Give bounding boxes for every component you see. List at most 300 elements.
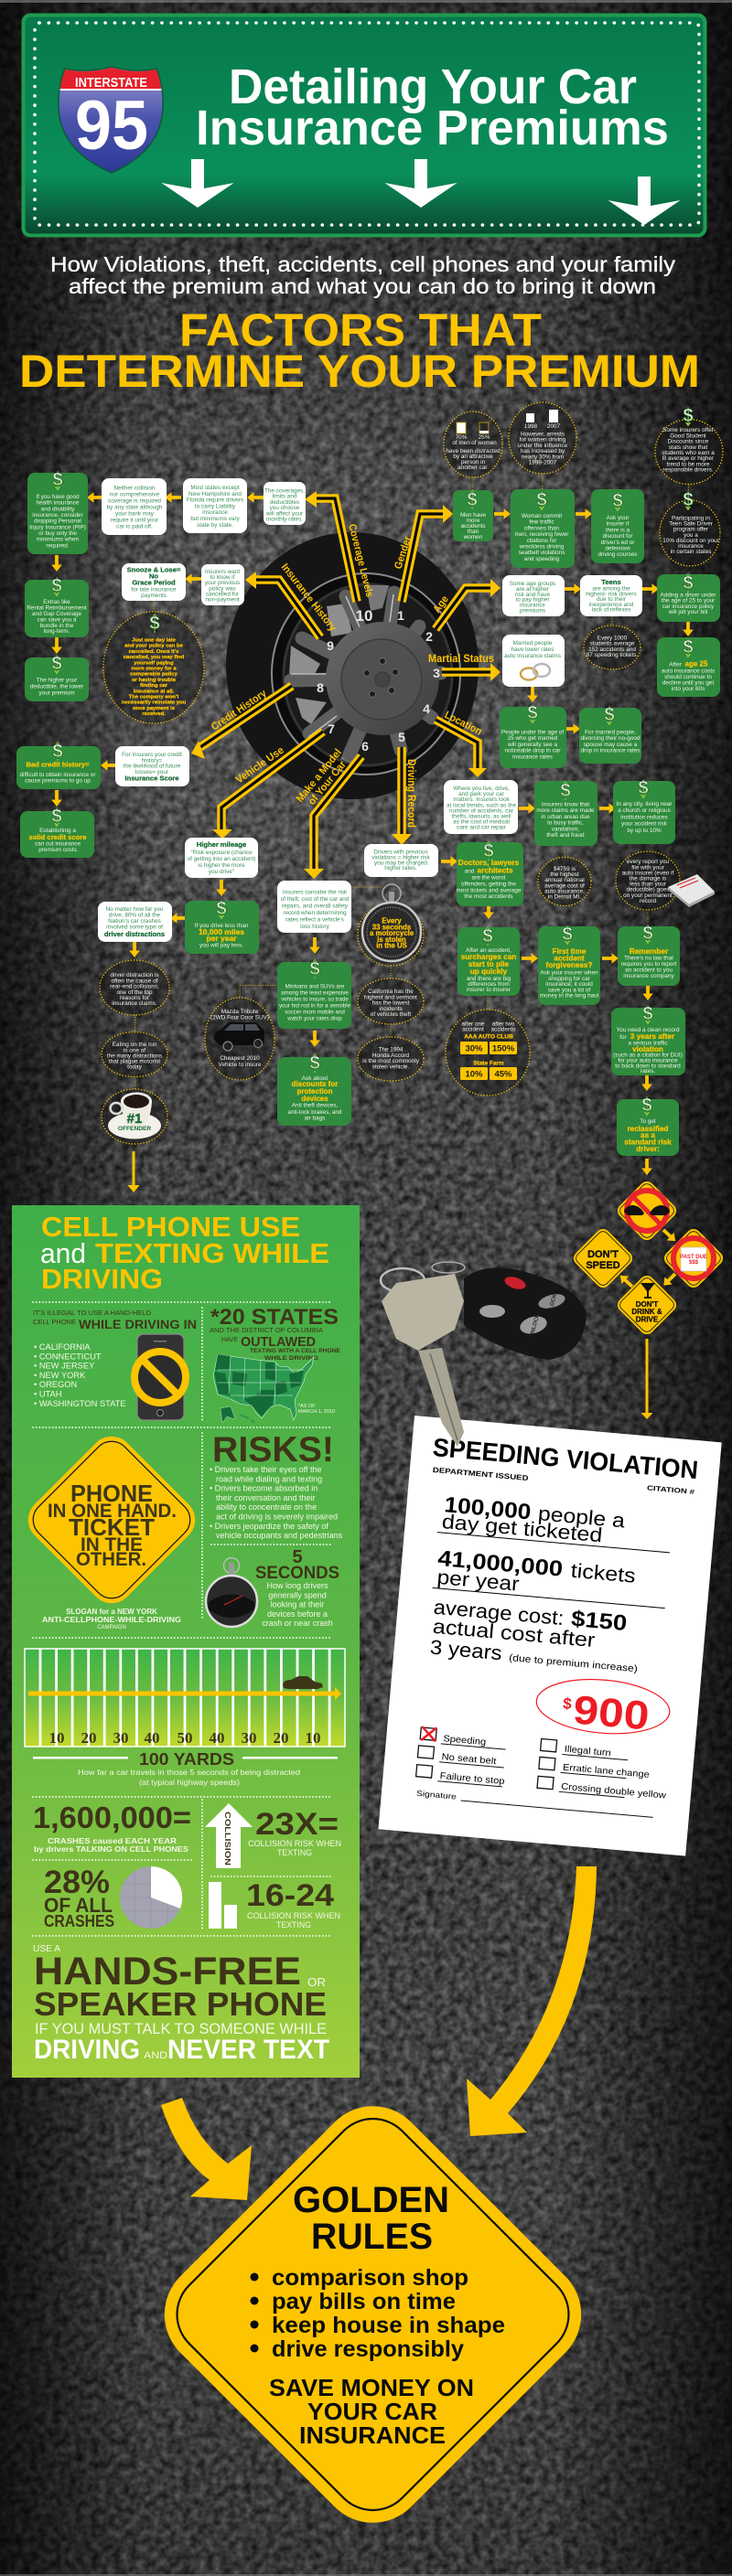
spoke numbers: 4 [423,701,430,716]
panel heading: TEXTING WHILE [95,1237,329,1269]
speeding violation ticket: day get ticketed [441,1510,603,1546]
icon: dollar: $ [683,637,694,657]
box: liability minimums: New Hampshire and [188,491,242,497]
hands-free advice: DRIVING [34,2035,140,2065]
icon: dollar: $ [51,576,62,596]
callout: permanent record: file with your [631,864,665,871]
panel heading: and [40,1237,86,1269]
box: church nearby: by up to 10% [627,828,662,834]
box: surcharges: After an accident, [466,947,511,954]
callout: detroit cost: $4759 is [554,866,576,872]
hands-free advice: HANDS-FREE [34,1950,301,1993]
callout: coffee number 1 offender: #1 [127,1111,142,1127]
box: liability minimums [183,478,247,533]
risks: RISKS! [212,1430,334,1470]
football field chart: 30 [113,1729,128,1747]
callout: mazda tribute: Mazda Tribute [221,1009,259,1015]
box: higher mileage: you drive" [209,869,234,875]
box: church nearby: institution reduces [620,814,668,820]
box: surcharges: and there are big [467,976,511,982]
slogan diamond sign: TICKET [69,1513,155,1541]
icon: wedding rings [521,664,550,680]
box: minivans: Minivans and SUVs are [285,984,345,989]
road arrow: gender: Gender [393,535,414,571]
icon: dollar: $ [527,703,538,723]
callout: california theft: highest and vermont [364,994,417,1000]
spoke numbers: 5 [398,730,405,744]
illegal states list: WHILE DRIVING IN [79,1317,197,1331]
28 percent stat: CRASHES [44,1912,114,1930]
box: protection devices: air bags [305,1116,325,1121]
16-24 stat: TEXTING [276,1920,311,1929]
box: deductible: The higher your [37,677,78,684]
icon: dollar: $ [562,925,573,945]
callout: every 1000 students: 152 accidents and [588,647,636,653]
illegal states list: • CONNECTICUT [34,1352,102,1361]
road arrow: martial status [428,654,501,681]
box: teens: highest- risk drivers [586,591,637,597]
callout: men distracted: have been distracted [446,448,501,454]
icon: dollar: $ [52,742,63,762]
5 seconds: SECONDS [255,1564,339,1583]
box: divorce: divorcing their no-good [580,735,640,742]
checkboxes: Signature [416,1789,458,1801]
box: women offenses: seatbelt violations [519,550,565,556]
box: minivans: soccer mom mobile and [285,1010,345,1015]
checkboxes: Failure to stop [439,1771,505,1787]
box: driver distractions: No matter how far you [106,906,164,913]
box: clean record: to back down to standard [615,1063,681,1069]
football field chart: 20 [273,1729,289,1747]
football field chart: 40 [209,1729,225,1747]
box: doctors lawyers architects [456,841,523,906]
box: age groups: Some age groups [510,581,555,587]
checkboxes: No seat belt [441,1752,497,1767]
callout: women DUI arrests: nearly 30% from [522,454,564,460]
box: higher mileage: "Risk exposure (chance [190,850,253,856]
icon: dollar: $ [149,614,160,634]
hands-free advice [33,1944,329,2065]
callout: one day late: The company won't [129,695,178,700]
box: insurers want to know: to know if [210,574,235,581]
box: where you live: as the cost of medical [453,819,510,826]
box: accident forgiveness: shopping for car [548,976,591,982]
box: health insurance tip: and disability [41,506,75,512]
callout: women DUI arrests: 1998 [524,423,538,430]
box: doctors lawyers architects: the most accidents [464,893,513,900]
speeding violation ticket: DEPARTMENT ISSUED [433,1466,529,1482]
box: driver's ed discount: driver's ed or [601,540,635,546]
box: theft and repairs [277,881,351,933]
title: Detailing Your Car [229,59,637,114]
box: previous violations: Drivers with previous [373,849,428,856]
collision arrow [205,1803,253,1868]
box: insurance score [115,746,189,786]
box: reclassified [617,1096,679,1156]
box: snooze and lose: for late insurance [131,587,177,593]
icon: dollar: $ [482,926,493,946]
golden rules heading: GOLDEN [293,2180,449,2220]
callout: men distracted: of women [471,440,497,446]
hands-free advice: OR [307,1975,326,1989]
box: coverages [264,482,306,525]
20 states stat: WHILE DRIVING [264,1355,318,1362]
box: health insurance tip: If you have good [36,494,80,500]
box: driver's ed discount: there is a [606,527,630,533]
callout: honda accord: is the most commonly [362,1058,420,1064]
box: extras [25,576,89,637]
callout: surcharge table: accidents [490,1026,516,1033]
icon: dollar: $ [641,1096,652,1116]
callout: permanent record: every report you [627,859,670,865]
box: women offenses: Woman commit [522,513,562,519]
box: under 25 married: noticeable drop in car [504,748,561,754]
icon: dollar: $ [638,778,649,798]
box: liability minimums: to carry Liability [195,503,236,509]
curved arrow: from panel to golden rules [161,2098,252,2200]
callout: mazda tribute: Vehicle to insure [219,1062,262,1068]
panel heading: CELL PHONE USE [41,1211,300,1243]
dotted connectors [135,474,688,1089]
box: accident forgiveness: insurance; it could [545,981,593,988]
heading: factors [19,305,700,397]
callout: women DUI arrests: 1998-2007 [529,459,557,466]
23x stat: TEXTING [277,1848,312,1857]
box: teens: Teens [601,578,621,586]
subtitle: affect the premium and what you can do to bring it down [69,274,656,298]
risks: road while dialing and texting [216,1474,322,1483]
box: coverages: limits and [273,494,297,500]
box: adding a driver under 25 [657,572,720,622]
callout: surcharge table: after two [492,1021,515,1028]
callout: rear-end: often the cause of [112,978,158,984]
golden rules heading [293,2180,449,2257]
risks: • Drivers jeopardize the safety of [210,1522,328,1531]
box: clean record: 3 years after [630,1032,675,1041]
title: Insurance Premiums [196,101,669,155]
road arrow: coverage levels [305,491,375,602]
speeding violation ticket: 100,000 [443,1492,532,1524]
callout: men distracted: another car. [458,465,489,471]
hands-free advice: SPEAKER PHONE [34,1985,327,2023]
callout: every 1000 students [584,625,640,669]
box: doctors lawyers architects: Doctors, lawyers [458,858,520,867]
heading: factors: DETERMINE YOUR PREMIUM [19,346,700,397]
box: driver distractions: drive, 80% of all the [109,913,161,918]
speeding violation ticket: CITATION # [647,1483,695,1496]
box: solid credit score: can cut insurance [35,841,81,847]
road arrow: martial status: Martial Status [428,654,494,665]
callout: stopwatch motorcycle theft: Every [382,916,402,925]
box: after age 25 [657,637,720,697]
box: adding a driver under 25: car insurance policy [662,604,715,610]
callout: surcharge table: after one [461,1021,485,1028]
box: bad credit history: difficult to obtain insurance or [19,772,96,778]
box: doctors lawyers architects: are the worst [472,874,506,882]
callout: detroit cost: auto insurance, [544,888,585,894]
icon: dollar: $ [604,705,615,725]
box: accident forgiveness: First time [553,947,587,956]
golden rules heading: RULES [311,2217,433,2257]
crashes stat [33,1801,191,1854]
icon: martini glass [640,1283,655,1299]
box: doctors lawyers architects: and [465,869,475,874]
box: solid credit score: solid credit score [29,833,86,841]
illegal states list: IT'S ILLEGAL TO USE A HAND-HELD [33,1309,152,1317]
speeding violation ticket: people a [537,1502,627,1532]
box: church nearby [613,778,675,844]
box: men accidents: accidents [461,523,485,529]
spoke numbers: 6 [361,739,369,754]
box: minivans: your hot rod in for a sensible [279,1002,351,1010]
callout: one day late: Just one day late [132,638,177,644]
callout: coffee number 1 offender: OFFENDER [118,1126,151,1132]
hands-free advice: USE A [33,1944,60,1954]
slogan caption: CAMPAIGN [97,1625,126,1630]
box: clean record: for [619,1034,628,1041]
box: under 25 married [500,703,566,768]
box: protection devices: Ask about [302,1075,328,1082]
callout: stopwatch motorcycle theft: is stolen [377,935,406,944]
box: higher mileage [185,838,258,878]
box: snooze and lose: No [149,572,158,580]
callout: good student discount: trend to be more [667,461,710,467]
callout: honda accord: Honda Accord [372,1053,410,1059]
box: age groups: risk and have [515,592,550,598]
23x stat: 23X= [255,1807,339,1842]
speeding violation ticket: SPEEDING VIOLATION [432,1433,699,1484]
box: liability minimums: but minimums vary [190,516,241,522]
panel heading [40,1211,329,1295]
icon: dollar: $ [467,490,478,510]
callout: women DUI arrests: 2007 [547,423,561,430]
callout: detroit cost: annual national [544,877,585,883]
sign: past due: $$$ [689,1260,699,1266]
callout: stopwatch motorcycle theft [358,884,424,966]
risks [210,1430,343,1540]
box: reclassified: To get [640,1118,656,1125]
20 states stat: AND THE DISTRICT OF COLUMBIA [210,1326,323,1334]
box: remember [618,924,680,986]
callout: mazda tribute: Cheapest 2010 [220,1055,260,1062]
box: collision coverage: your bank may [115,510,155,518]
box: deductible: your premium [38,689,75,697]
callout: one day late: or having trouble [132,678,177,683]
slogan diamond sign: IN THE [81,1534,143,1555]
sign: don't drink and drive: DRINK & [631,1308,662,1316]
slogan diamond sign: IN ONE HAND. [48,1501,177,1522]
illegal states list: CELL PHONE [33,1318,76,1326]
box: minivans: vehicles to insure, so trade [281,997,349,1002]
icon: report box [668,874,715,907]
box: accident forgiveness [538,925,600,1005]
map of USA [213,1354,335,1423]
box: age groups: are at higher [516,586,550,593]
box: theft and repairs: rates reflect a vehicle's [285,916,344,924]
callout: detroit cost: average cost of [544,882,585,889]
callout: one day late: once payment is [133,706,176,711]
box: protection devices: Anti theft devices, [292,1103,338,1108]
slogan caption [42,1608,181,1630]
callout: surcharge table: AAA AUTO CLUB [464,1033,513,1041]
box: theft and repairs: loss history [300,924,330,930]
box: age groups: insurance [520,603,545,609]
speeding violation ticket [378,1416,722,1856]
100 yards: How far a car travels in those 5 seconds of being distracted [78,1768,300,1777]
box: driver distractions [98,902,172,942]
icon: stopwatch [206,1558,257,1627]
box: insurance score: losses= your [135,769,169,775]
box: 10,000 miles: you will pay less. [199,942,243,949]
callout: surcharge table: 10% [465,1070,483,1079]
box: bad credit history: cause premiums to go up [25,777,91,785]
callout: every 1000 students: 87 speeding tickets. [587,652,638,658]
icon: car silhouette [283,1676,323,1689]
road arrow: location [436,710,487,777]
icon: dollar: $ [536,490,547,510]
callout: teen safe driver: Teen Safe Driver [669,521,714,528]
hands-free advice: IF YOU MUST TALK TO SOMEONE WHILE [35,2020,327,2037]
box: insurers want to know: policy was [209,585,236,592]
icon: dollar: $ [683,573,694,593]
box: insurers want to know: cancelled for [206,591,240,597]
sign: don't drink and drive: DRIVE [636,1315,659,1324]
road arrow: gender [393,505,453,602]
spoke numbers: 10 [356,607,372,625]
box: insurance score: the likelihood of future [124,764,181,770]
map of USA: MARCH 1, 2010 [298,1409,335,1415]
callout: eating on the run: the many distractions [107,1053,162,1059]
box: protection devices: protection [296,1087,333,1096]
20 states stat: OUTLAWED [241,1334,316,1350]
callout: detroit cost: in Detroit MI. [548,894,581,900]
box: surcharges: differences from [468,981,510,988]
golden rules tagline: YOUR CAR [307,2398,437,2425]
box: teens: due to their [597,596,627,603]
100 yards: 100 YARDS [139,1750,234,1769]
sign: don't drink and drive: DON'T [636,1300,658,1309]
box: doctors lawyers architects: architects [477,865,513,874]
box: after age 25: After [669,662,683,668]
callout: detroit cost: the highest [550,871,579,878]
box: protection devices: anti-lock brakes, and [288,1109,342,1116]
sign: don't speed: DON'T [587,1249,619,1260]
road arrow: credit history [191,686,292,759]
risks: their conversation and their [216,1493,316,1502]
checkboxes: Speeding [443,1734,487,1748]
callout: good student discount: Good Student [670,433,706,439]
box: remember: insurance company [623,973,675,979]
box: teens: lack of reflexes [592,607,630,614]
road arrow: coverage levels: Coverage Levels [346,523,375,598]
icon: dollar: $ [612,491,623,511]
box: insurers want to know: non-payment [205,596,240,604]
sign: past due: PAST DUE [680,1255,707,1260]
road arrow: make and model: Make a Model [295,747,344,805]
box: under 25 married: People under the age of [501,730,564,735]
illegal states list: • NEW YORK [34,1371,86,1380]
risks: • Drivers take their eyes off the [210,1465,322,1474]
box: urban areas [534,781,597,846]
callout: california theft: of vehicles theft [371,1011,411,1018]
road arrow: insurance history [245,561,339,637]
car keys and fob [381,1262,587,1447]
slogan caption: SLOGAN for a NEW YORK [66,1608,157,1616]
box: clean record [611,1004,685,1075]
box: previous violations: you may be charged [374,860,427,866]
box: accident forgiveness: forgiveness? [546,961,592,969]
yellow distance arrow [28,1687,341,1700]
subtitle [50,252,676,298]
road arrow: make and model: of Your Car [307,759,349,807]
box: minivans [277,958,351,1029]
5 seconds: How long drivers [266,1581,328,1590]
box: minivans: watch your rates drop [286,1015,342,1022]
box: 10,000 miles: 10,000 miles [199,927,244,936]
road arrow: make and model [295,747,361,879]
box: protection devices: discounts for [292,1080,338,1088]
callout: california theft [358,978,424,1024]
box: liability minimums: state by state. [197,522,233,529]
curved arrow: from ticket to golden rules [467,1866,597,2136]
box: after age 25: auto insurance costs [662,668,715,675]
pie chart [120,1866,182,1929]
box: solid credit score: Establishing a [39,828,76,834]
5 seconds: 5 [292,1547,303,1567]
highway sign header [24,15,705,236]
callout: california theft: California has the [368,989,414,995]
5 seconds: generally spend [268,1590,327,1599]
callout: men distracted [444,412,502,477]
box: health insurance tip: or buy only the [38,530,77,537]
callout: rear-end [100,960,169,1015]
risks: act of driving is severely impaired [216,1512,338,1522]
icon: dollar: $ [52,470,63,490]
box: higher mileage: is higher the more [198,862,245,869]
hands-free advice: AND [144,2050,167,2061]
speeding violation ticket: tickets [570,1559,637,1587]
checkboxes [414,1726,671,1820]
road arrow: insurance history: Insurance History [279,561,339,634]
box: insurance score: history= [142,757,163,764]
road arrow: location: Location [443,710,483,738]
16-24 stat [246,1878,340,1929]
callout: stopwatch motorcycle theft: in the US [376,942,407,950]
box: after age 25: should continue to [664,674,712,680]
golden rules tagline: SAVE MONEY ON [269,2374,474,2401]
box: coverages: deductibles [270,499,299,506]
callout: california theft: has the lowest [372,1000,410,1007]
callout: women DUI arrests: However, arrests [521,432,565,437]
box: driver distractions: driver distractions [104,930,165,938]
tire and wheel [226,532,479,799]
box: after age 25: age 25 [685,660,708,668]
football field chart: 50 [178,1729,192,1747]
box: adding a driver under 25: the age of 25 to your [662,598,716,604]
callout: eating on the run [102,1031,167,1077]
box: collision coverage [102,478,167,535]
callout: one day late: finding car [140,683,168,689]
box: men accidents [453,490,493,541]
golden rules tagline [269,2374,474,2449]
5 seconds: crash or near crash [262,1619,333,1628]
box: bad credit history [16,741,101,789]
box: where you live: matters. Insurers look [453,796,511,803]
road arrow: vehicle use [212,732,323,839]
road arrow: driving record [392,747,416,845]
box: insurance score: Insurance Score [124,774,179,783]
callout: surcharge table: 30% [465,1044,483,1053]
